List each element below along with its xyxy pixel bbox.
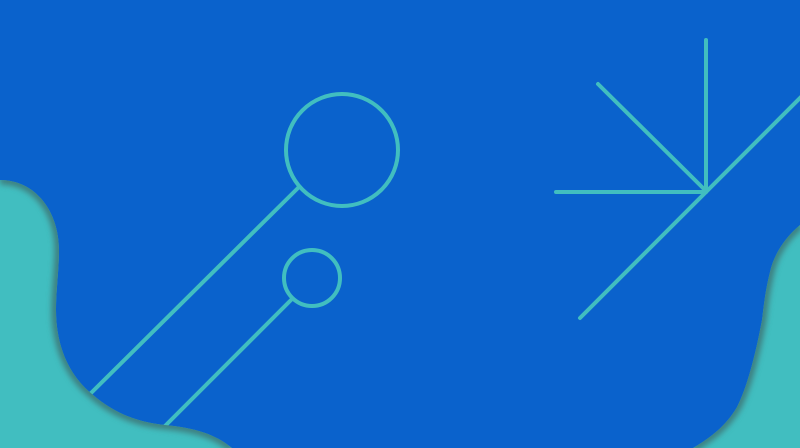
small circle [284,250,340,306]
long diagonal [580,92,800,318]
right teal blob [693,225,800,448]
diagonal ray [598,84,706,191]
starburst lines [556,40,800,318]
large circle connector [85,187,299,399]
small circle connector [160,299,292,431]
lines and circles: left connector group [85,94,398,431]
vertical ray [704,40,708,191]
left teal blob [0,180,232,448]
horizontal ray [556,190,706,194]
large circle [286,94,398,206]
